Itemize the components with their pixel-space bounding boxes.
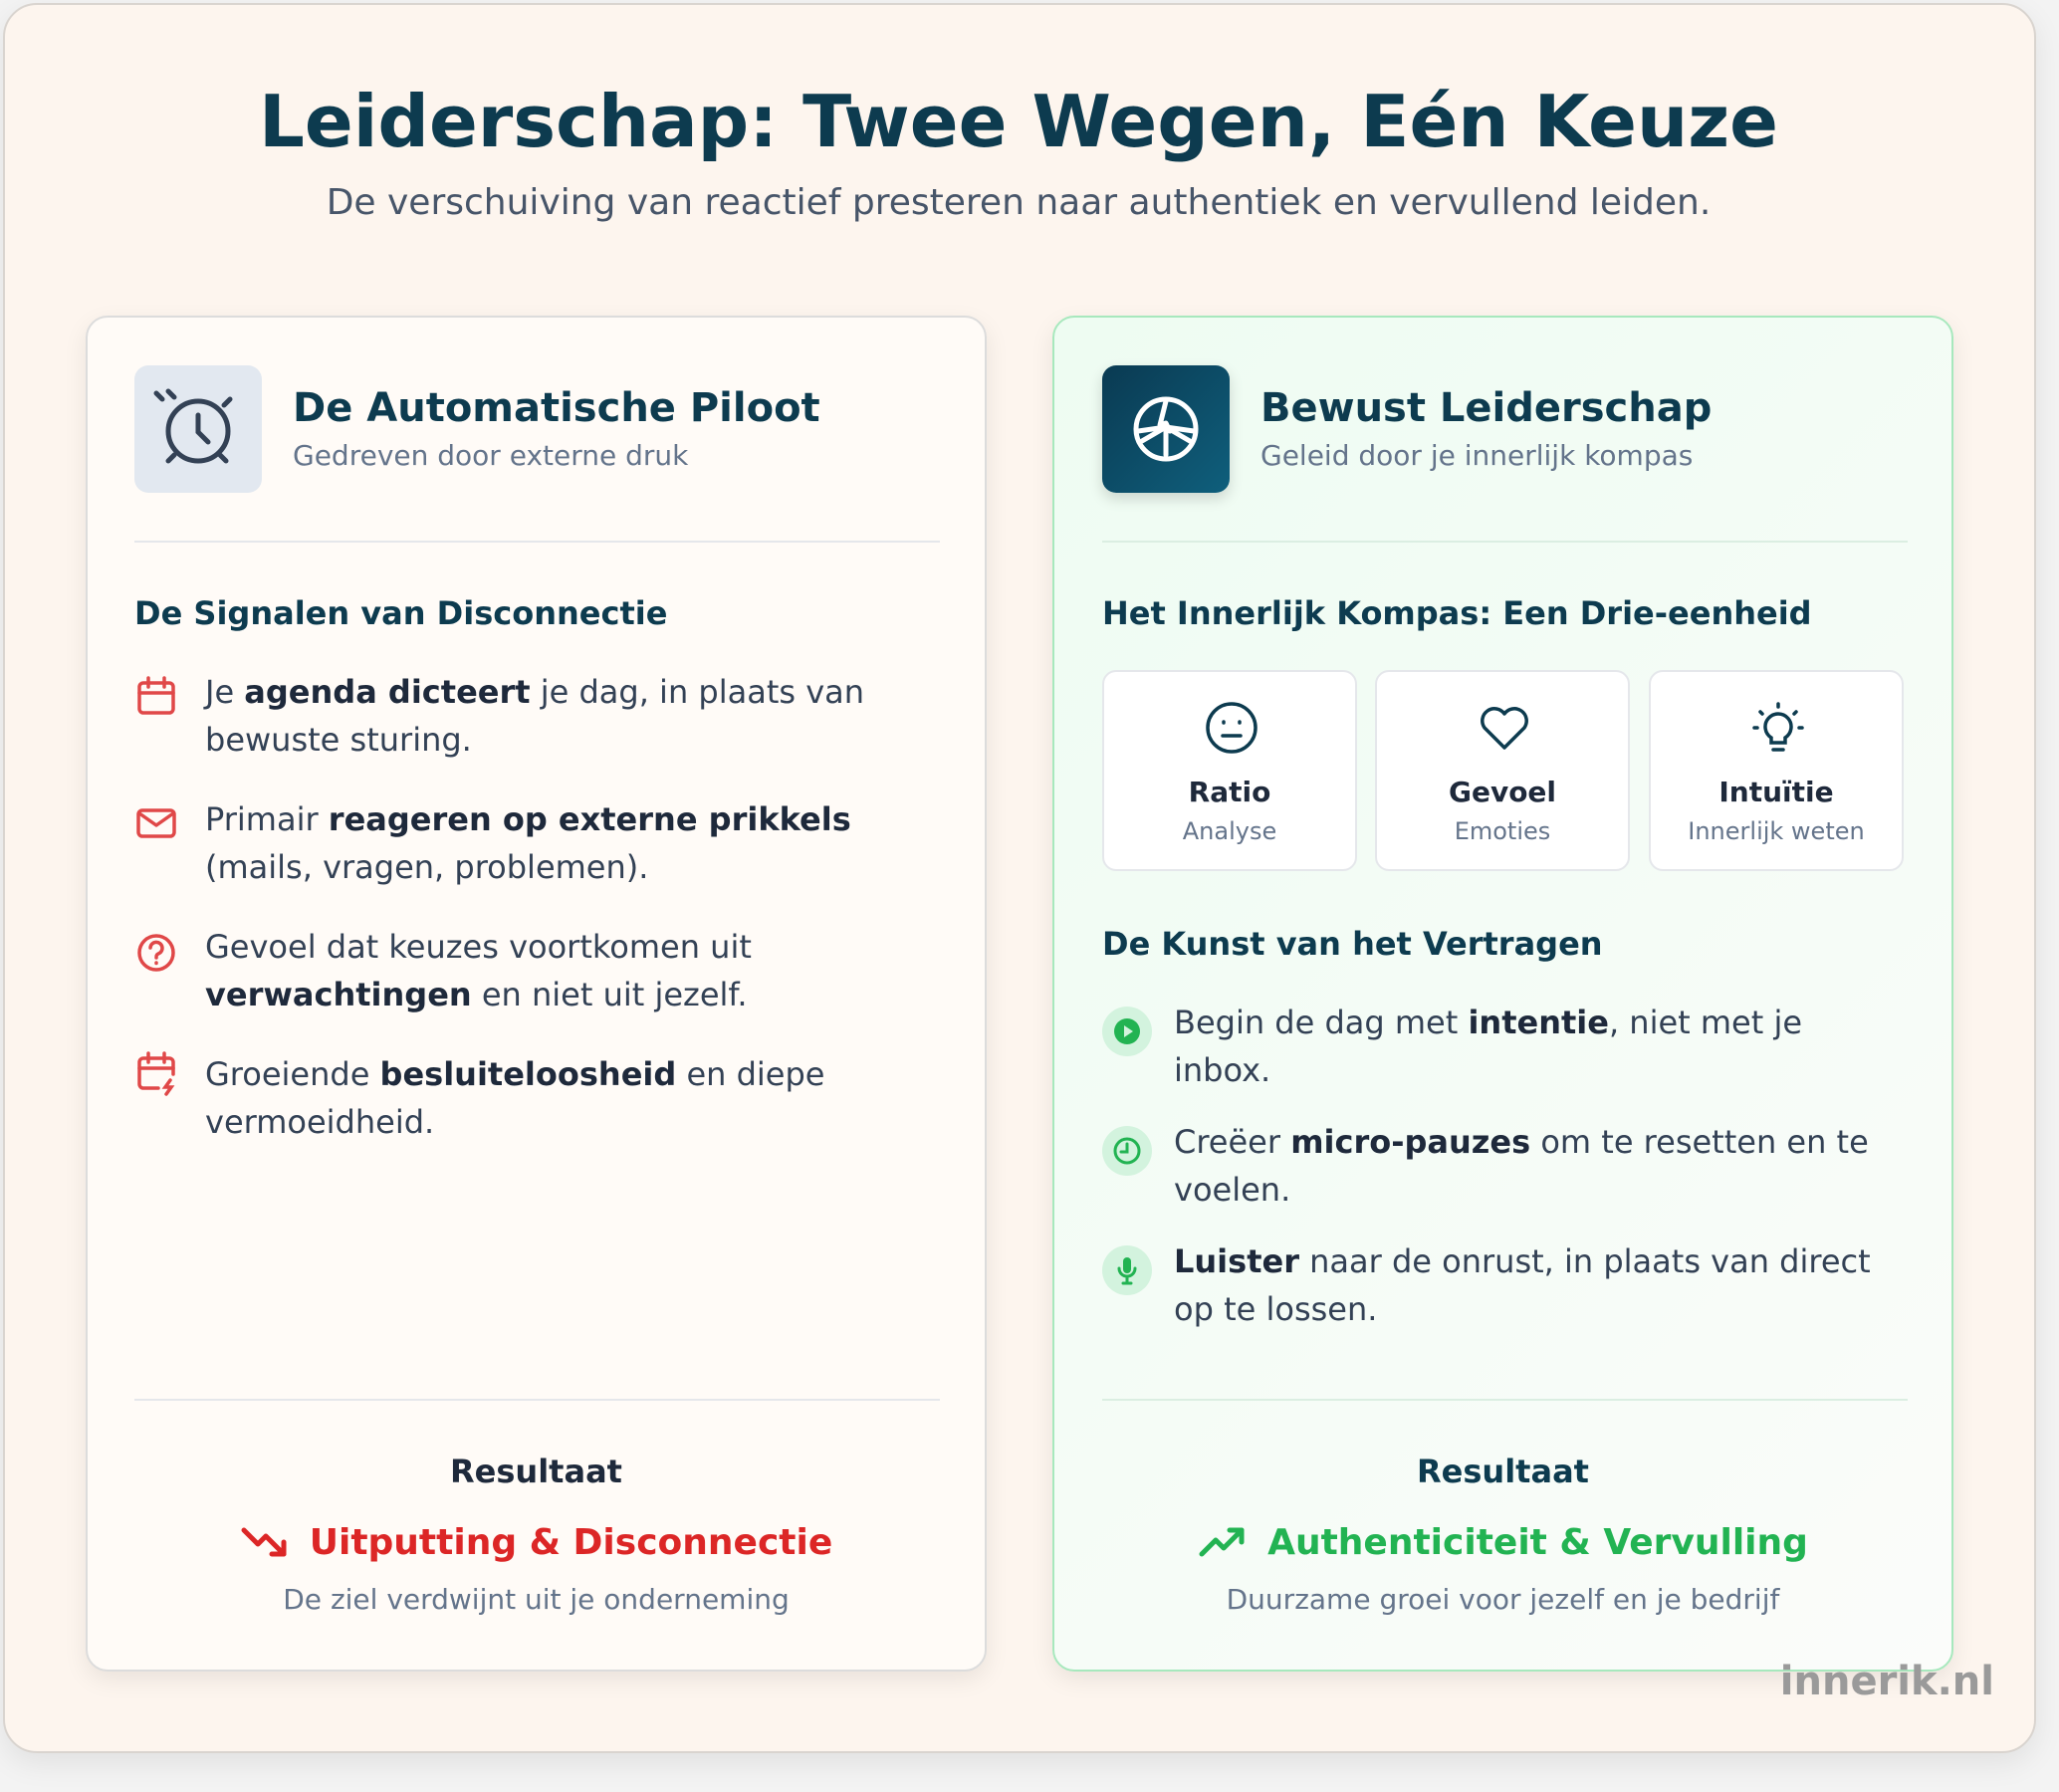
result — [1199, 1453, 1808, 1616]
card: ratio — [1102, 670, 1357, 871]
item: mail — [136, 800, 851, 886]
result: Resultaat — [450, 1453, 622, 1490]
panel: bewust leiderschap — [1052, 316, 1953, 1672]
icon: stopwatch — [134, 365, 262, 493]
card: ratio: Analyse — [1183, 817, 1276, 845]
panel: bewust leiderschap: Luister naar de onrust, in plaats van direct op te lossen. — [1174, 1242, 1871, 1328]
item: micro-pauzes — [1102, 1123, 1869, 1209]
card: gevoel — [1375, 670, 1630, 871]
panel: automatische piloot: Primair reageren op externe prikkels (mails, vragen, problemen). — [205, 800, 851, 886]
result: Authenticiteit & Vervulling — [1267, 1522, 1808, 1563]
panel: automatische piloot: Je agenda dicteert je dag, in plaats van bewuste sturing. — [205, 673, 864, 759]
panel: automatische piloot — [86, 316, 987, 1672]
card: gevoel: Emoties — [1455, 817, 1550, 845]
card: intuitie: Intuïtie — [1718, 776, 1834, 808]
watermark: innerik.nl — [1780, 1659, 1994, 1704]
card: gevoel: Gevoel — [1449, 776, 1556, 808]
panel: bewust leiderschap: Begin de dag met intentie, niet met je inbox. — [1174, 1004, 1802, 1089]
panel subtitle: Geleid door je innerlijk kompas — [1260, 439, 1693, 472]
title: Leiderschap: Twee Wegen, Eén Keuze — [259, 80, 1778, 163]
result: Resultaat — [1417, 1453, 1589, 1490]
item: question — [137, 928, 752, 1013]
panel: automatische piloot: Groeiende besluiteloosheid en diepe vermoeidheid. — [205, 1055, 824, 1141]
section heading: kompas: Het Innerlijk Kompas: Een Drie-eenheid — [1102, 594, 1812, 632]
panel subtitle: Gedreven door externe druk — [293, 439, 688, 472]
item: agenda — [137, 673, 864, 759]
subtitle: De verschuiving van reactief presteren naar authentiek en vervullend leiden. — [327, 182, 1711, 223]
list: signals — [136, 673, 864, 1141]
list: practices — [1102, 1004, 1871, 1328]
icon: compass wheel — [1102, 365, 1230, 493]
card: intuitie: Innerlijk weten — [1688, 817, 1865, 845]
section heading: vertragen: De Kunst van het Vertragen — [1102, 925, 1603, 963]
card: intuitie — [1649, 670, 1904, 871]
panel: automatische piloot: Gevoel dat keuzes voortkomen uit verwachtingen en niet uit jezelf. — [205, 928, 752, 1013]
panel: bewust leiderschap: Creëer micro-pauzes om te resetten en te voelen. — [1174, 1123, 1869, 1209]
result: De ziel verdwijnt uit je onderneming — [283, 1583, 790, 1616]
item: fatigue — [137, 1051, 824, 1141]
result: Uitputting & Disconnectie — [310, 1522, 832, 1563]
item: luister — [1102, 1242, 1871, 1328]
panel title: Bewust Leiderschap — [1260, 385, 1712, 431]
result — [241, 1453, 832, 1616]
panel title: De Automatische Piloot — [293, 385, 820, 431]
result: Duurzame groei voor jezelf en je bedrijf — [1227, 1583, 1779, 1616]
section heading: De Signalen van Disconnectie — [134, 594, 667, 632]
card: ratio: Ratio — [1189, 776, 1270, 808]
item: intentie — [1102, 1004, 1802, 1089]
